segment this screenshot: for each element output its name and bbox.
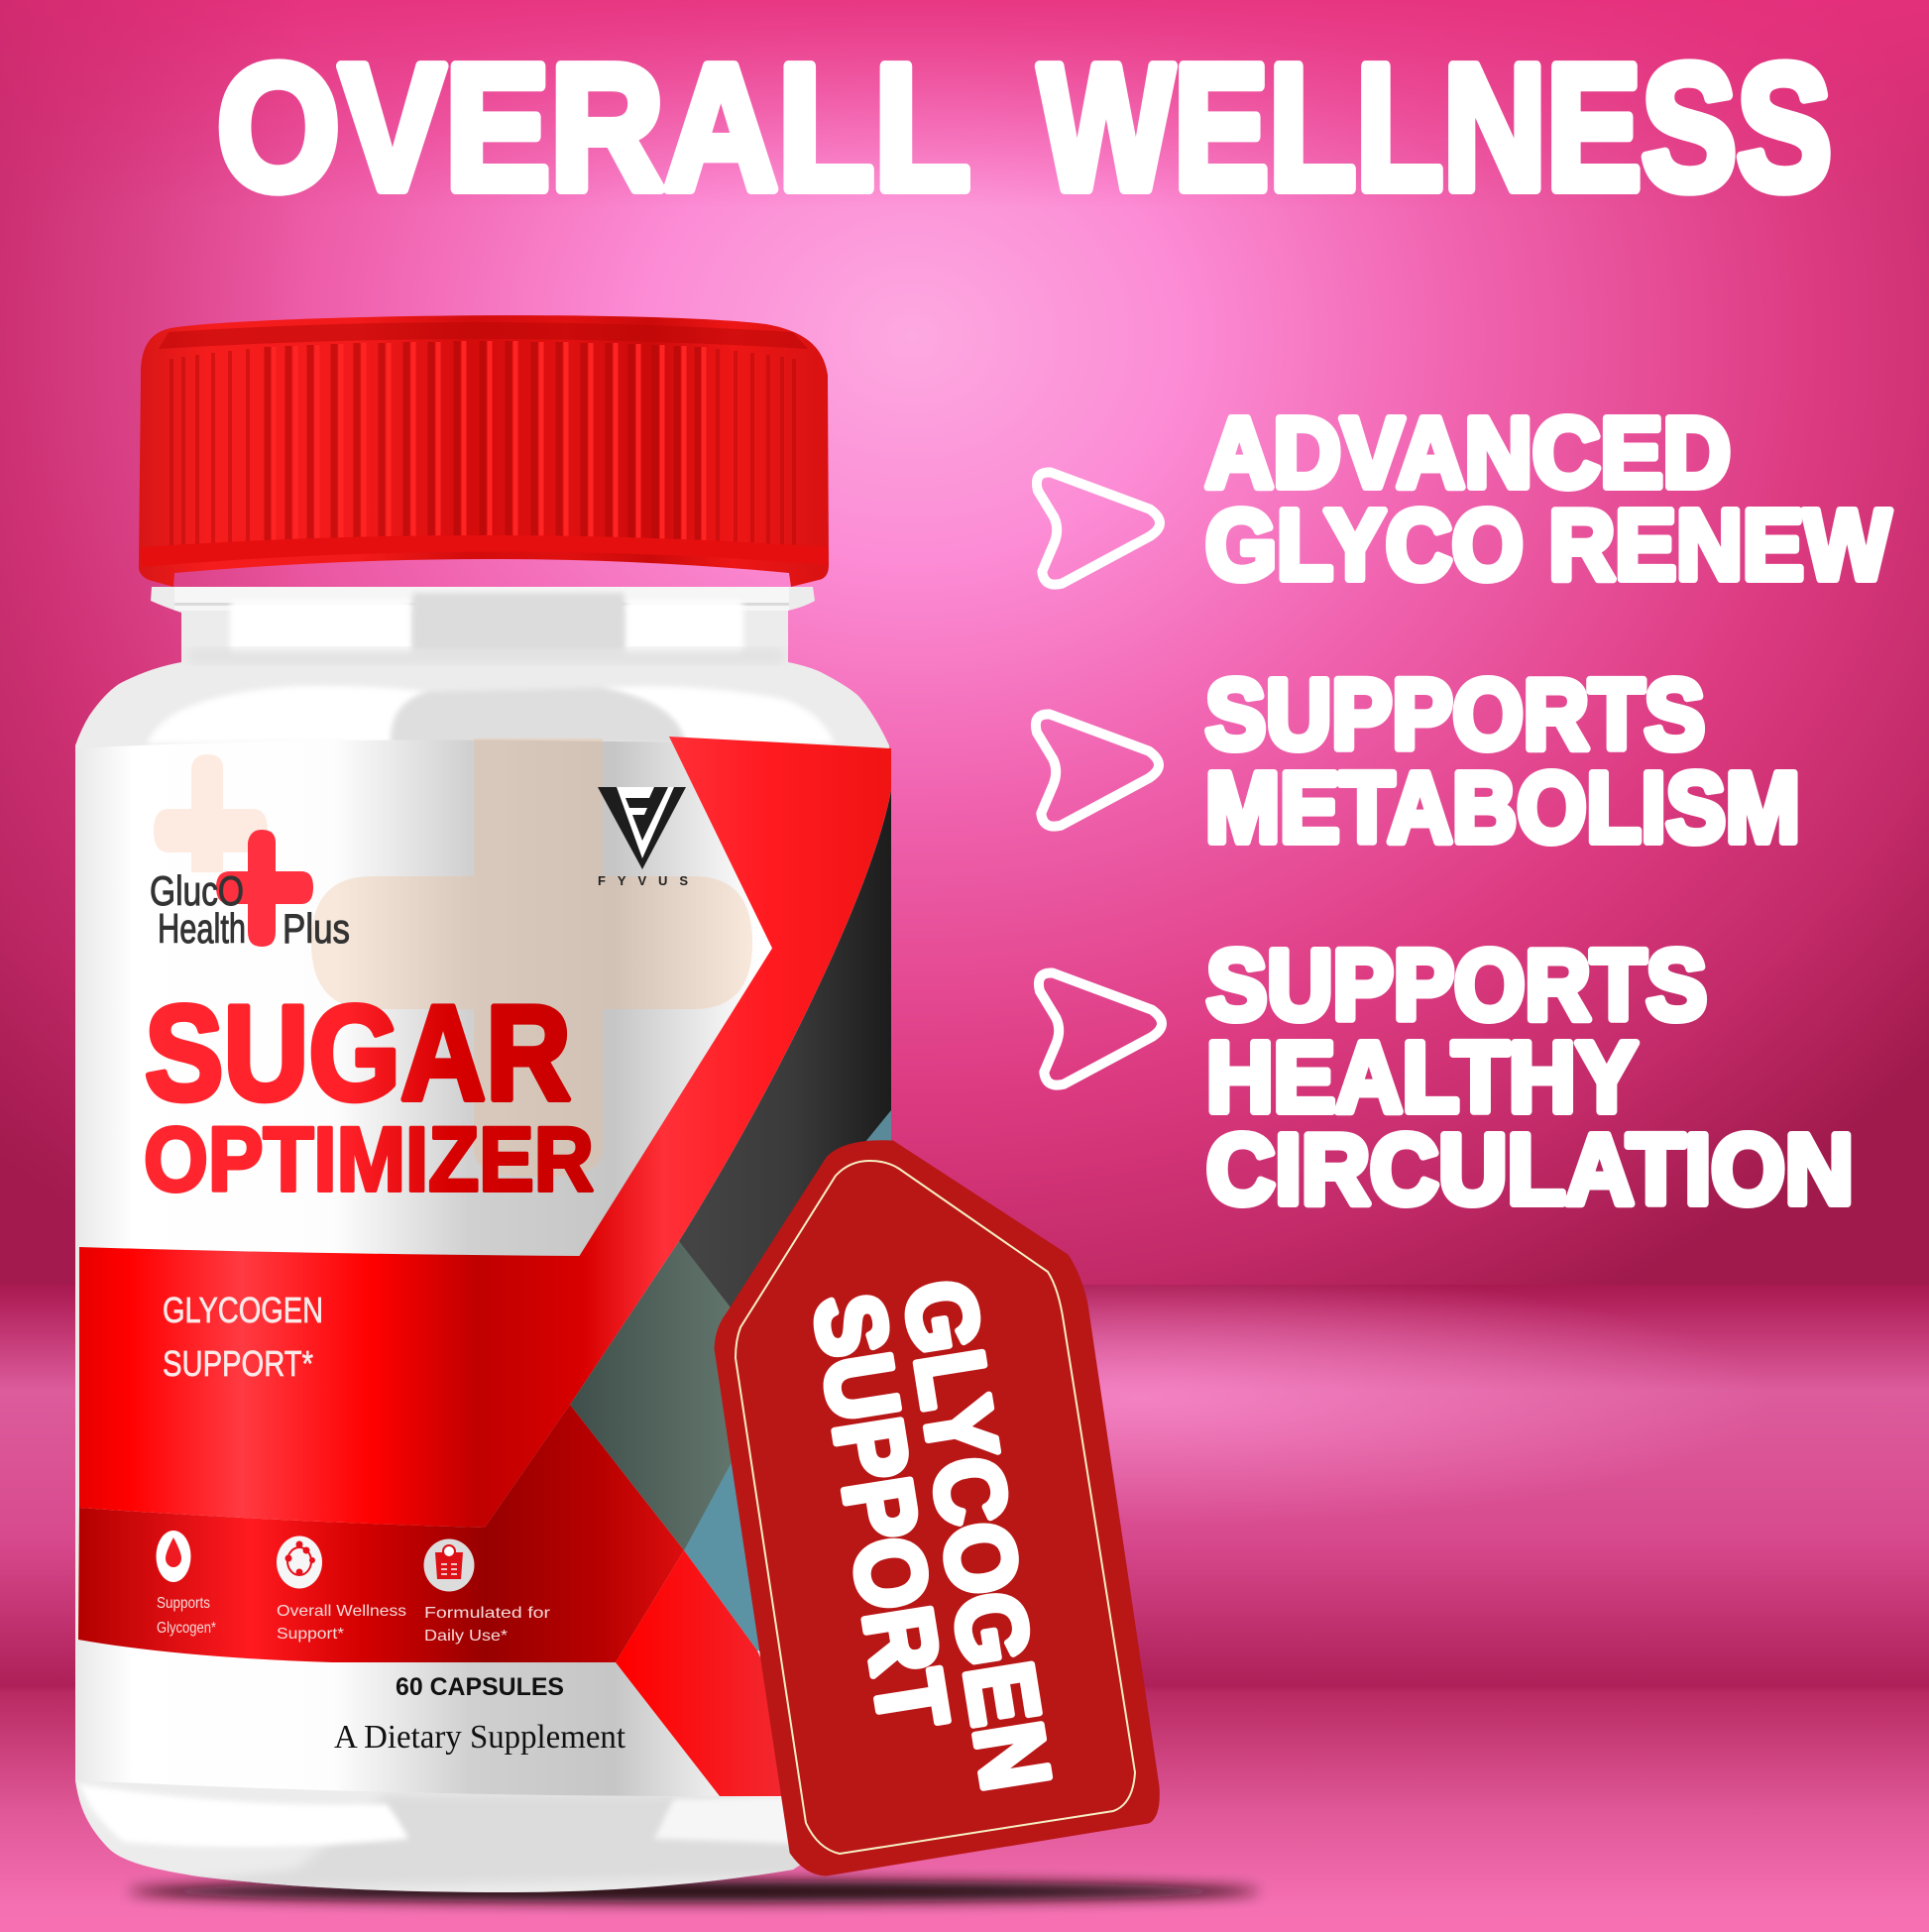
label claim text — [163, 1290, 323, 1384]
logo: brand name: Plus — [283, 905, 350, 952]
tag text — [793, 1273, 1072, 1797]
icon captions: Supports — [157, 1595, 210, 1612]
tag text: SUPPORT — [793, 1287, 969, 1736]
bottle shadow on floor — [129, 1880, 1259, 1902]
cross watermark large — [311, 739, 752, 1177]
bottle shoulder highlights — [147, 686, 835, 743]
bullet: supports healthy circulation — [1039, 930, 1854, 1225]
bottle neck highlights — [174, 585, 789, 663]
capsule count: 60 CAPSULES — [396, 1673, 564, 1701]
bullet text 2: SUPPORTS — [1205, 659, 1705, 770]
bottle body — [75, 587, 891, 1892]
label claim text: SUPPORT* — [163, 1343, 313, 1384]
icon captions: Overall Wellness — [277, 1603, 406, 1620]
bullet text 2 — [1205, 659, 1800, 863]
bullet text 1: GLYCO RENEW — [1205, 490, 1891, 601]
logo: brand name: GlucO — [150, 867, 244, 914]
logo: FYVUS — [598, 787, 688, 888]
logo: brand name — [150, 867, 350, 952]
title: OVERALL — [217, 28, 970, 228]
icon: drop — [157, 1531, 190, 1582]
icon: arrow outline 1 — [1037, 472, 1160, 585]
bullet text 1: ADVANCED — [1205, 398, 1731, 509]
bullet text 3: SUPPORTS — [1206, 930, 1707, 1041]
icon: wellness circle — [277, 1536, 322, 1588]
blue panel — [684, 1289, 891, 1685]
icon captions: Support* — [277, 1626, 344, 1643]
icon captions: Glycogen* — [157, 1620, 216, 1637]
icon captions: Formulated for — [424, 1605, 551, 1622]
bullet text 2: METABOLISM — [1205, 752, 1800, 863]
product name: SUGAR — [145, 977, 571, 1128]
title — [217, 28, 1832, 228]
label claim text: GLYCOGEN — [163, 1290, 323, 1330]
bullet text 3: HEALTHY — [1206, 1022, 1638, 1133]
tag inner stitch line — [736, 1161, 1135, 1854]
bullet: advanced glyco renew — [1037, 398, 1891, 601]
product name — [144, 977, 594, 1210]
icon: arrow outline 3 — [1039, 972, 1162, 1085]
logo: red cross — [216, 830, 313, 947]
label — [75, 737, 891, 1799]
product name: OPTIMIZER — [144, 1109, 594, 1210]
tag shape — [718, 1144, 1156, 1873]
teal panel — [570, 1090, 891, 1685]
icon captions: Daily Use* — [424, 1628, 508, 1645]
icon: scale — [424, 1538, 474, 1592]
bullet: supports metabolism — [1036, 659, 1800, 863]
cap ribs — [171, 341, 794, 547]
bullet text 3 — [1206, 930, 1854, 1225]
bottle base highlights — [81, 1784, 800, 1891]
cap — [139, 315, 829, 587]
bullet text 3: CIRCULATION — [1206, 1114, 1854, 1225]
dark red icon strip — [78, 1405, 684, 1662]
tag text: GLYCOGEN — [883, 1273, 1072, 1797]
black panel — [679, 790, 891, 1307]
red chevron band — [79, 737, 891, 1528]
hang tag — [718, 1144, 1156, 1873]
bullet text 1 — [1205, 398, 1891, 601]
icon captions — [157, 1595, 551, 1645]
corner teal — [852, 1100, 891, 1150]
lower red wedge — [616, 1550, 823, 1796]
label white base — [75, 739, 891, 1799]
product bottle — [75, 315, 891, 1893]
logo: brand name: Health — [158, 905, 246, 952]
supplement line: A Dietary Supplement — [334, 1719, 626, 1756]
cross watermark small — [154, 754, 268, 872]
icon: arrow outline 2 — [1036, 714, 1159, 827]
logo: FYVUS: FYVUS — [598, 873, 688, 888]
